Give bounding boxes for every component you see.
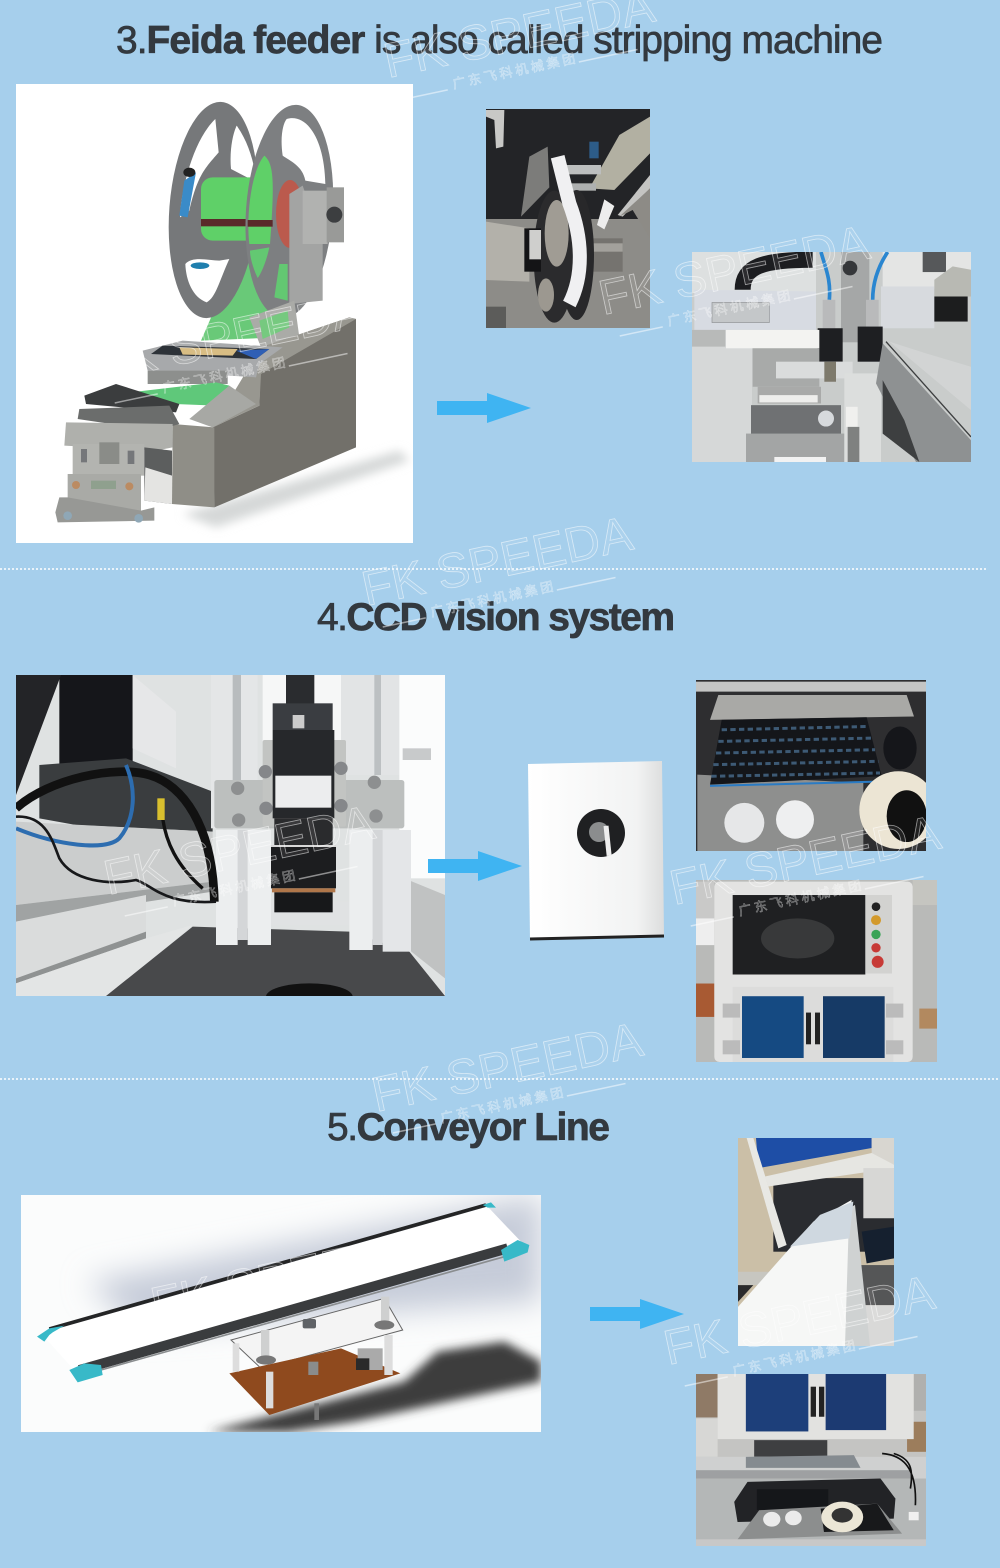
watermarks: 广东飞科机械集团 (451, 50, 579, 92)
title: Feida feeder: 3.Feida feeder is also called stripping machine (116, 19, 883, 62)
title: Conveyor Line: 5.Conveyor Line (327, 1106, 610, 1149)
watermarks: FK SPEEDA (99, 796, 380, 906)
watermarks: FK SPEEDA (357, 507, 638, 617)
title: CCD vision system: 4.CCD vision system (317, 596, 675, 639)
arrow: feeder (437, 393, 531, 423)
photo: CCD camera mounted (16, 675, 445, 996)
watermarks: FK SPEEDA (367, 1013, 648, 1123)
watermarks: 广东飞科机械集团 (666, 287, 794, 329)
photo: feeder tape reel (486, 109, 650, 328)
photo: feeder installed in machine (692, 252, 971, 462)
watermarks: 广东飞科机械集团 (439, 1084, 567, 1126)
watermarks: 广东飞科机械集团 (429, 578, 557, 620)
photo: conveyor in machine (738, 1138, 894, 1346)
watermarks: FK SPEEDA (89, 283, 370, 393)
illustration: conveyor CAD model (21, 1195, 541, 1432)
watermarks: FK SPEEDA (665, 806, 946, 916)
photo: machine front with screen (696, 880, 937, 1062)
watermarks: FK SPEEDA (594, 216, 875, 326)
watermarks (89, 0, 949, 1391)
photo: keyboard and material (696, 680, 926, 851)
watermarks: 广东飞科机械集团 (737, 877, 865, 919)
watermarks: 广东飞科机械集团 (731, 1337, 859, 1379)
arrow: conveyor (590, 1299, 684, 1329)
watermarks: FK SPEEDA (659, 1266, 940, 1376)
photo: machine with keyboard tray (696, 1374, 926, 1546)
illustration: feeder CAD model (16, 84, 413, 543)
divider (0, 568, 986, 570)
arrow: CCD (428, 851, 522, 881)
divider (0, 1078, 1000, 1080)
watermarks: FK SPEEDA (146, 1223, 427, 1333)
watermarks: 广东飞科机械集团 (161, 354, 289, 396)
watermarks: 广东飞科机械集团 (171, 867, 299, 909)
photo: camera behind white plate (528, 761, 664, 940)
